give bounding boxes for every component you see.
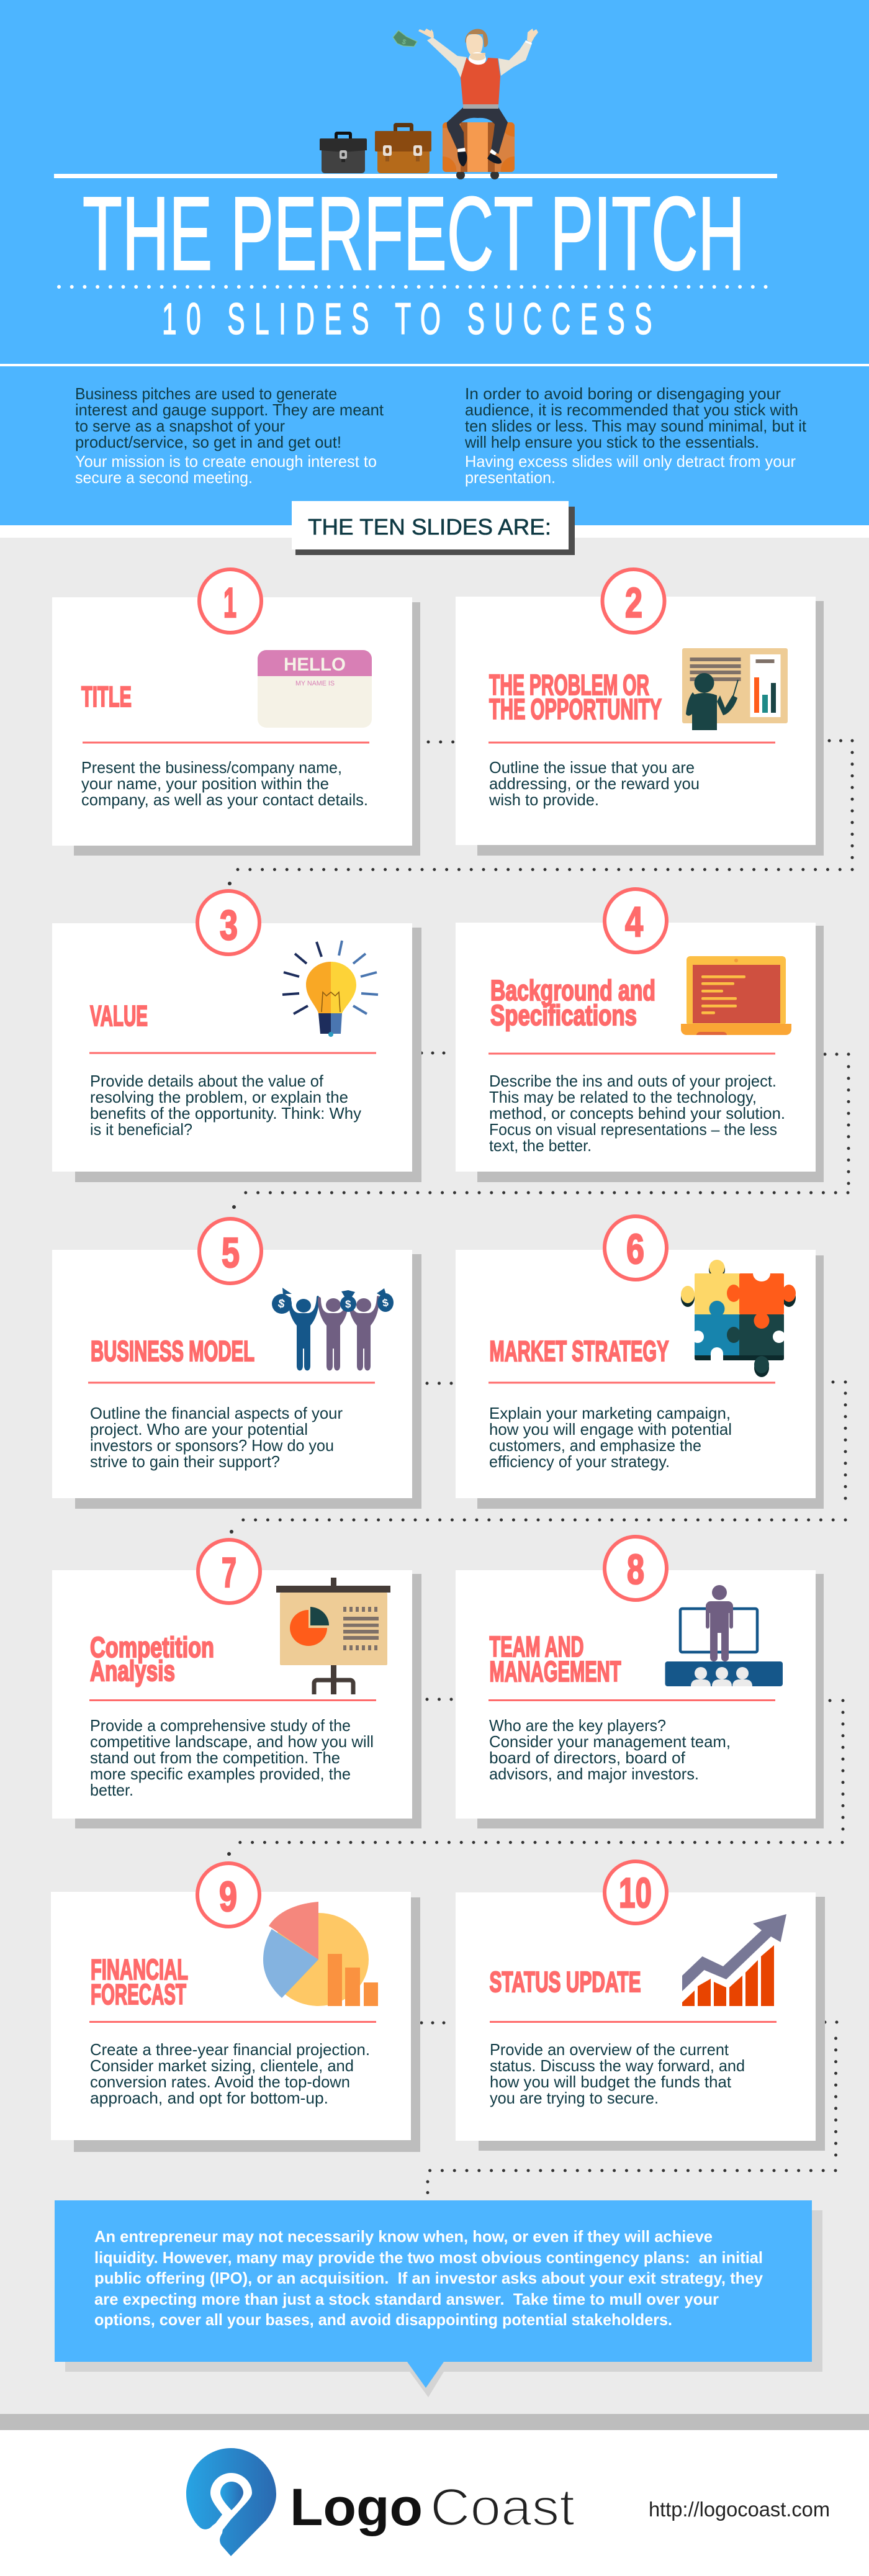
body text: conversion rates. Avoid the top-down (90, 2072, 350, 2091)
panel: slide 6 market strategy (456, 1216, 824, 1509)
heading (91, 1953, 188, 2010)
body text: status. Discuss the way forward, and (490, 2056, 745, 2075)
body text: Outline the issue that you are (489, 758, 695, 777)
heading: MARKET STRATEGY (489, 1335, 669, 1367)
intro text left: Business pitches are used to generate (75, 384, 337, 403)
icon: people holding money bags (272, 1288, 394, 1371)
intro text right: audience, it is recommended that you stick with (465, 400, 798, 419)
heading: FORECAST (91, 1978, 186, 2010)
icon: people holding money bags: $ (381, 1296, 390, 1309)
body text: efficiency of your strategy. (489, 1452, 670, 1471)
body text: how you will engage with potential (489, 1420, 732, 1439)
badge 5 (199, 1219, 261, 1283)
body text: Focus on visual representations – the less (489, 1120, 777, 1139)
body text: your name, your position within the (81, 774, 329, 793)
body text (490, 2040, 745, 2107)
intro text right: ten slides or less. This may sound minimal, but it (465, 417, 807, 435)
body text (90, 1072, 361, 1139)
heading: Analysis (90, 1655, 175, 1687)
website url: http://logocoast.com (649, 2498, 830, 2521)
body text (90, 1404, 343, 1471)
connector dots: 7 to 9 (227, 1699, 844, 1856)
body text: Describe the ins and outs of your project. (489, 1072, 777, 1090)
icon: man with raised arms (418, 29, 538, 166)
icon: people holding money bags: $ (277, 1297, 286, 1311)
intro text right: presentation. (465, 468, 556, 487)
intro text left (75, 384, 384, 487)
body text: Present the business/company name, (81, 758, 342, 777)
icon: dark briefcase (320, 132, 367, 173)
body text: method, or concepts behind your solution. (489, 1104, 785, 1123)
icon: people holding money bags: $ (345, 1298, 351, 1310)
panel: slide 9 financial forecast (51, 1863, 420, 2152)
body text: strive to gain their support? (90, 1452, 280, 1471)
badge 5: 5 (222, 1229, 240, 1277)
body text: project. Who are your potential (90, 1420, 308, 1439)
body text: Consider market sizing, clientele, and (90, 2056, 354, 2075)
body text (81, 758, 368, 809)
callout: options, cover all your bases, and avoid disappointing potential stakeholders. (94, 2310, 672, 2329)
body text (489, 1072, 785, 1155)
heading (490, 974, 655, 1031)
intro text right: In order to avoid boring or disengaging your (465, 384, 781, 403)
icon: light bulb (282, 941, 378, 1037)
body text (90, 2040, 370, 2107)
body text (489, 1404, 732, 1471)
heading (489, 1630, 621, 1688)
badge 2: 2 (625, 579, 642, 626)
header band (0, 0, 869, 538)
icon: location pin nine mark (186, 2448, 276, 2556)
panel: slide 2 problem or opportunity (456, 569, 824, 856)
body text: wish to provide. (489, 790, 599, 809)
panel: slide 4 background and specifications (456, 889, 824, 1182)
body text: investors or sponsors? How do you (90, 1436, 334, 1455)
body text: resolving the problem, or explain the (90, 1088, 348, 1106)
body text: board of directors, board of (489, 1748, 686, 1767)
icon: puzzle (681, 1260, 796, 1377)
badge 9 (197, 1863, 259, 1927)
body text: Create a three-year financial projection. (90, 2040, 370, 2059)
body text (90, 1716, 374, 1799)
connector dots: 1 to 3 (228, 741, 853, 885)
body text: customers, and emphasize the (489, 1436, 701, 1455)
heading (90, 1631, 214, 1687)
callout: liquidity. However, many may provide the two most obvious contingency plans: an initial (94, 2248, 763, 2267)
heading: BUSINESS MODEL (91, 1335, 254, 1367)
heading: VALUE (90, 1000, 148, 1032)
body text: Provide details about the value of (90, 1072, 324, 1090)
intro text left: secure a second meeting. (75, 468, 253, 487)
badge 3: 3 (220, 902, 238, 949)
heading: THE OPPORTUNITY (489, 693, 662, 725)
icon: flying banknote (393, 30, 417, 47)
panel: slide 8 team and management (456, 1537, 824, 1828)
badge 6 (605, 1216, 667, 1280)
dotted divider (59, 285, 766, 289)
icon: speaker on stage with audience (665, 1585, 783, 1686)
body text (489, 1716, 731, 1783)
panel: slide 10 status update (456, 1861, 825, 2151)
callout: An entrepreneur may not necessarily know when, how, or even if they will achieve (94, 2227, 713, 2246)
body text: advisors, and major investors. (489, 1765, 699, 1783)
heading: TITLE (81, 680, 132, 713)
badge 7 (198, 1540, 260, 1603)
body text: more specific examples provided, the (90, 1765, 351, 1783)
badge 1 (199, 569, 261, 633)
body text: better. (90, 1781, 133, 1799)
icon: pie chart with bars (263, 1902, 378, 2006)
heading box: the ten slides are (292, 501, 575, 555)
illustration: man on suitcase with briefcases (320, 29, 538, 179)
icon: rising chart arrow (682, 1914, 786, 2006)
badge 6: 6 (626, 1226, 644, 1273)
body text: This may be related to the technology, (489, 1088, 757, 1106)
body text: benefits of the opportunity. Think: Why (90, 1104, 361, 1123)
callout (55, 2200, 822, 2397)
intro text left: product/service, so get in and get out! (75, 433, 341, 451)
icon: presentation easel (276, 1578, 390, 1694)
badge 4: 4 (625, 898, 643, 946)
panel: slide 5 business model (52, 1219, 421, 1509)
icon: hello name tag (258, 650, 372, 728)
body text: approach, and opt for bottom-up. (90, 2089, 328, 2107)
badge 10: 10 (619, 1869, 652, 1917)
body text: is it beneficial? (90, 1120, 192, 1139)
badge 2 (602, 569, 664, 633)
body text: Who are the key players? (489, 1716, 666, 1735)
body text: Provide a comprehensive study of the (90, 1716, 351, 1735)
connector dots: 3 to 5 (232, 1053, 849, 1209)
wordmark: Coast (430, 2478, 575, 2536)
intro text right: will help ensure you stick to the essentials. (464, 433, 759, 451)
body text: Provide an overview of the current (490, 2040, 729, 2059)
icon: hello name tag: MY NAME IS (295, 680, 335, 687)
panel: slide 7 competition analysis (52, 1540, 421, 1828)
connector dots: 9 to callout (421, 2022, 837, 2193)
intro text left: interest and gauge support. They are meant (75, 400, 384, 419)
icon: presenter at board (682, 648, 788, 730)
badge 10 (605, 1861, 667, 1923)
logo (186, 2448, 575, 2556)
icon: flying banknote: $ (401, 38, 407, 47)
heading box: the ten slides are: THE TEN SLIDES ARE: (308, 514, 551, 540)
intro text right (464, 384, 807, 487)
panel: slide 1 title (52, 569, 420, 856)
icon: orange suitcase (443, 122, 515, 179)
body text: Outline the financial aspects of your (90, 1404, 343, 1422)
body text: text, the better. (489, 1136, 592, 1155)
heading: Background and (490, 974, 655, 1006)
heading: MANAGEMENT (489, 1655, 621, 1688)
body text (489, 758, 700, 809)
icon: laptop (681, 956, 791, 1035)
intro text right: Having excess slides will only detract from your (465, 452, 796, 471)
wordmark (290, 2478, 575, 2536)
callout: are expecting more than just a stock standard answer. Take time to mull over your (94, 2290, 719, 2308)
body text: company, as well as your contact details. (81, 790, 368, 809)
icon: brown briefcase (375, 123, 431, 173)
badge 9: 9 (219, 1873, 237, 1920)
badge 7: 7 (222, 1549, 236, 1596)
heading: STATUS UPDATE (489, 1966, 641, 1998)
panel: slide 3 value (52, 891, 421, 1182)
body text: you are trying to secure. (490, 2089, 659, 2107)
wordmark: Logo (290, 2478, 423, 2536)
badge 8 (605, 1537, 667, 1600)
heading (489, 669, 662, 725)
connector dots: 5 to 7 (230, 1382, 846, 1534)
footer band (0, 2414, 869, 2576)
heading: Competition (90, 1631, 214, 1663)
badge 3 (197, 891, 259, 954)
badge 4 (605, 889, 667, 952)
heading: TEAM AND (489, 1630, 583, 1663)
body text: how you will budget the funds that (490, 2072, 732, 2091)
body text: Explain your marketing campaign, (489, 1404, 731, 1422)
intro text left: to serve as a snapshot of your (75, 417, 285, 435)
callout: public offering (IPO), or an acquisition. If an investor asks about your exit strategy, they (94, 2269, 763, 2287)
body text: addressing, or the reward you (489, 774, 700, 793)
body text: competitive landscape, and how you will (90, 1732, 374, 1751)
badge 1: 1 (223, 579, 236, 626)
intro text left: Your mission is to create enough interest to (75, 452, 377, 471)
heading: Specifications (490, 999, 637, 1031)
subtitle: 10 SLIDES TO SUCCESS (162, 295, 652, 344)
body text: stand out from the competition. The (90, 1748, 340, 1767)
body text: Consider your management team, (489, 1732, 731, 1751)
badge 8: 8 (627, 1546, 644, 1593)
heading: THE PROBLEM OR (489, 669, 649, 701)
icon: hello name tag: HELLO (284, 654, 346, 675)
heading: FINANCIAL (91, 1953, 188, 1986)
